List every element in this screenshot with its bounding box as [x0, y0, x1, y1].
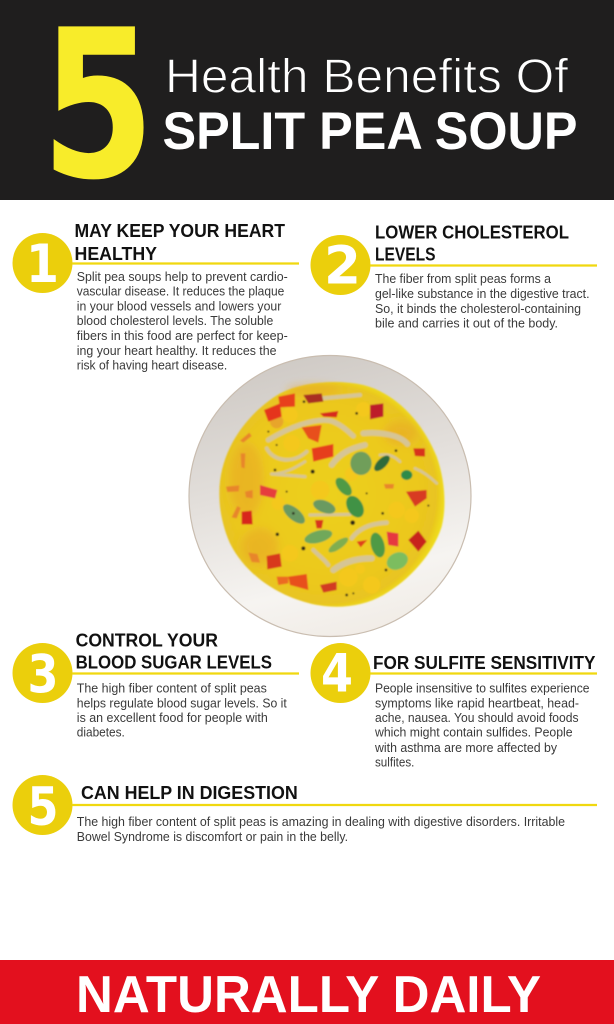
heading 2: LEVELS — [375, 244, 436, 265]
header band — [0, 0, 614, 226]
body text 3: diabetes. — [77, 726, 125, 740]
heading 1: HEALTHY — [74, 243, 158, 264]
heading 1: MAY KEEP YOUR HEART — [74, 220, 286, 241]
number badge 2: 2 — [324, 236, 361, 296]
body text 4: with asthma are more affected by — [374, 741, 558, 755]
body text 5: Bowel Syndrome is discomfort or pain in the belly. — [77, 830, 348, 844]
basil leaves — [280, 452, 412, 573]
heading 2: LOWER CHOLESTEROL — [375, 222, 569, 242]
heading 1 — [74, 220, 286, 264]
body text 2: So, it binds the cholesterol-containing — [375, 302, 581, 316]
body text 1: ing your heart healthy. It reduces the — [77, 344, 276, 358]
number badge 3 — [12, 643, 72, 706]
body text 4: ache, nausea. You should avoid foods — [375, 711, 578, 725]
benefit 3 — [12, 630, 299, 740]
soup bowl photo — [189, 356, 471, 636]
number badge 4 — [310, 643, 370, 705]
faint orange pieces — [226, 433, 394, 563]
body text 1: risk of having heart disease. — [77, 359, 227, 373]
body text 1: in your blood vessels and lowers your — [77, 299, 282, 313]
heading 3: CONTROL YOUR — [76, 630, 218, 651]
body text 4 — [374, 682, 590, 770]
heading 4: FOR SULFITE SENSITIVITY — [373, 652, 596, 673]
footer band — [0, 960, 614, 1024]
benefit 4 — [310, 643, 597, 770]
body text 2: bile and carries it out of the body. — [375, 317, 558, 331]
heading 5: CAN HELP IN DIGESTION — [81, 782, 298, 803]
body text 2: gel-like substance in the digestive tract. — [375, 287, 590, 301]
number badge 2 — [310, 235, 370, 296]
number badge 1 — [12, 233, 72, 295]
body text 1: vascular disease. It reduces the plaque — [77, 285, 284, 299]
body text 4: sulfites. — [375, 756, 414, 770]
body text 3: The high fiber content of split peas — [77, 682, 267, 696]
heading 3: BLOOD SUGAR LEVELS — [76, 652, 272, 673]
plate — [189, 356, 471, 636]
footer brand text: NATURALLY DAILY — [76, 966, 541, 1024]
soup — [219, 382, 444, 607]
chicken strands — [267, 395, 437, 570]
number badge 5: 5 — [28, 777, 58, 838]
corn — [270, 402, 419, 594]
number badge 5 — [12, 775, 72, 838]
number badge 3: 3 — [28, 644, 58, 706]
heading 3 — [76, 630, 272, 673]
title line 1: Health Benefits Of — [165, 50, 569, 104]
title line 2: SPLIT PEA SOUP — [162, 102, 578, 161]
body text 2 — [375, 272, 590, 331]
heading 2 — [375, 222, 569, 265]
body text 1 — [77, 270, 288, 373]
black pepper flecks — [267, 400, 429, 596]
number badge 1: 1 — [26, 234, 59, 295]
body text 4: People insensitive to sulfites experience — [375, 682, 590, 696]
number badge 4: 4 — [321, 644, 353, 705]
body text 3 — [77, 682, 287, 740]
benefit 1 — [12, 220, 299, 373]
soup warm patches — [230, 385, 417, 565]
body text 3: helps regulate blood sugar levels. So it — [77, 696, 287, 710]
body text 2: The fiber from split peas forms a — [375, 272, 552, 286]
body text 4: which might contain sulfides. People — [374, 726, 573, 740]
body text 3: is an excellent food for people with — [77, 711, 268, 725]
body text 1: fibers in this food are perfect for keep- — [77, 329, 288, 343]
body text 5: The high fiber content of split peas is amazing in dealing with digestive disorders. Irritable — [77, 815, 565, 829]
benefit 2 — [310, 222, 597, 331]
red peppers — [242, 393, 427, 593]
body text 4: symptoms like rapid heartbeat, head- — [375, 696, 579, 710]
body text 1: Split pea soups help to prevent cardio- — [77, 270, 288, 284]
body text 1: blood cholesterol levels. The soluble — [77, 314, 273, 328]
benefit 5 — [12, 775, 597, 844]
body text 5 — [77, 815, 565, 844]
